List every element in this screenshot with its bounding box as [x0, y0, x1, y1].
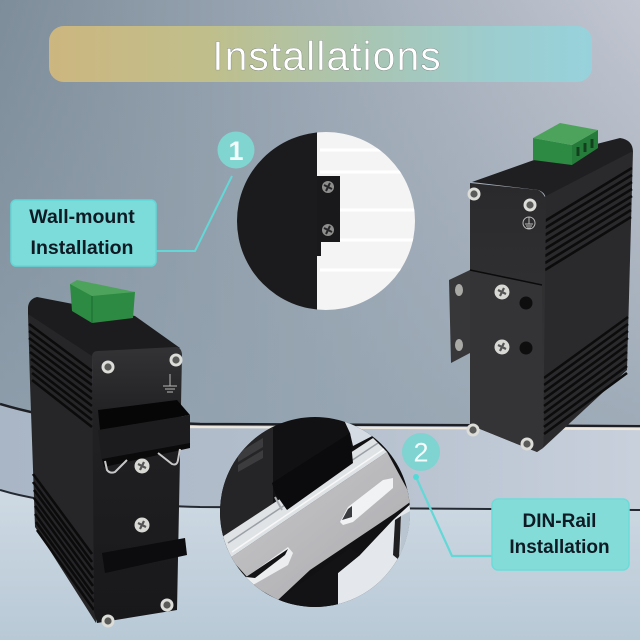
ground symbol — [523, 217, 535, 229]
cooling fins — [29, 324, 94, 610]
callout: din-rail installation — [413, 474, 629, 570]
screws — [102, 360, 114, 374]
ground symbol — [163, 374, 177, 392]
lower rail clip — [102, 538, 187, 573]
badge 1 — [218, 132, 254, 168]
badge 1: 1 — [228, 136, 244, 166]
cooling fins — [544, 168, 632, 434]
right device: wall mounted — [449, 123, 633, 452]
detail circle: wall-mount — [237, 132, 417, 310]
terminal block — [533, 123, 598, 165]
terminal block — [70, 280, 135, 323]
detail circle: din-rail — [218, 415, 415, 610]
screws — [468, 188, 480, 200]
chassis top — [28, 297, 180, 357]
front plate — [470, 183, 546, 452]
callout: wall-mount installation: Installation — [31, 237, 133, 259]
callout: wall-mount installation: Wall-mount — [29, 206, 135, 228]
upper rail clip — [98, 400, 190, 430]
callout: din-rail installation: DIN-Rail — [523, 511, 596, 532]
chassis side — [543, 151, 633, 448]
front plate — [92, 347, 182, 623]
title banner — [49, 26, 592, 82]
badge 2: 2 — [413, 438, 429, 468]
mounting plate — [470, 270, 543, 452]
chassis side — [28, 314, 96, 623]
left device: din-rail mounted — [28, 280, 190, 628]
chassis top — [472, 138, 633, 199]
title: Installations — [212, 33, 442, 79]
callout: wall-mount installation — [11, 176, 232, 266]
badge 2 — [402, 433, 440, 471]
spring clips — [105, 449, 180, 473]
mounting bracket — [449, 270, 470, 363]
callout: din-rail installation: Installation — [509, 537, 610, 558]
